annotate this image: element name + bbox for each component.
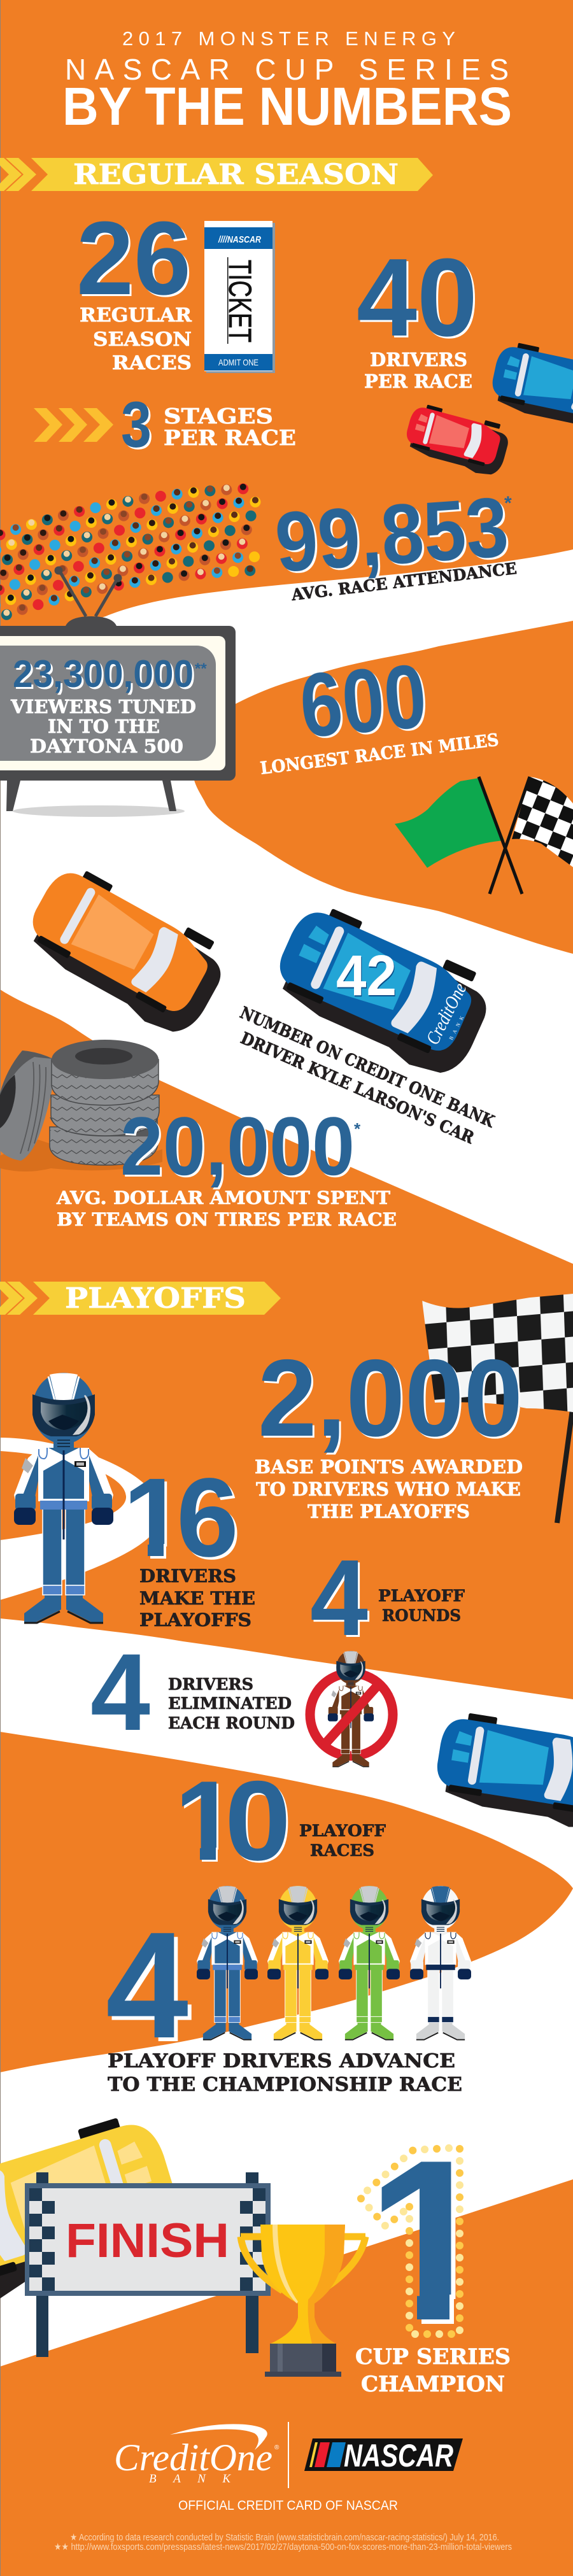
stat: 26 regular season races: SEASON [93,329,192,351]
stat: 40 drivers per race: DRIVERS [370,349,467,371]
icon: ticket: TICKET [222,260,258,343]
stat: 26 regular season races: REGULAR [80,304,192,327]
icon: ticket: ADMIT ONE [218,357,258,367]
icon: television [0,567,236,817]
stat: 1 cup series champion: 1 [366,2112,493,2368]
stat: 20,000 on tires: 20,000 [120,1100,355,1192]
stat: 2,000 base points: TO DRIVERS WHO MAKE [256,1478,521,1500]
stat: 4 drivers eliminated each round: EACH ROUND [168,1714,295,1732]
icon: car number 42: CreditOne [422,980,470,1048]
stat: 26 regular season races: RACES [112,352,192,374]
stat: 16 drivers make the playoffs: DRIVERS [139,1566,236,1587]
stat: 16 drivers make the playoffs: 1 [123,1455,185,1580]
stat: 4 drivers eliminated each round: DRIVERS [168,1675,253,1694]
icon: yellow race car [0,2108,190,2318]
stat: 4 playoff rounds: PLAYOFF [378,1587,465,1605]
logo: NASCAR: NASCAR [344,2438,453,2473]
stat: 4 playoff rounds [310,1538,465,1659]
stat: 99,853: * [504,493,512,514]
stat: 2,000 base points: THE PLAYOFFS [308,1501,470,1522]
title: BY THE NUMBERS [62,76,512,136]
white road: upper bend [0,549,573,1264]
white road: playoff swoosh [0,1438,161,1600]
sign: finish: FINISH [66,2214,229,2268]
stat: 10 playoff races: 1 [174,1757,237,1884]
sign: finish [25,2172,271,2357]
icon: driver blue [197,1886,258,2040]
icon: trophy [241,2225,365,2377]
title: 2017 MONSTER ENERGY [122,27,455,50]
stat: 99,853: 99,853 [272,480,511,590]
icon: crossed flags [395,777,573,894]
title: NASCAR CUP SERIES [65,53,509,86]
stat: 16 drivers make the playoffs: MAKE THE [139,1588,255,1609]
stat: 10 playoff races: PLAYOFF [299,1822,386,1840]
tagline: OFFICIAL CREDIT CARD OF NASCAR [178,2498,398,2513]
white road: lower bend [0,1618,573,2367]
icon: driver green [339,1886,400,2040]
stat: big 4: 4 [106,1901,188,2070]
label: playoff drivers advance: TO THE CHAMPIONSHIP RACE [108,2074,462,2096]
icon: chevrons [34,408,113,442]
label: number on credit one bank car: NUMBER ON CREDIT ONE BANK [237,1003,498,1132]
icon: driver in blue suit [14,1373,113,1623]
stat: 2,000 base points: BASE POINTS AWARDED [255,1456,523,1478]
stat: 1 cup series champion: CHAMPION [361,2372,505,2397]
stat: 16 drivers make the playoffs: 6 [176,1455,239,1580]
stat: 4 playoff rounds: 4 [310,1538,368,1659]
icon: television: IN TO THE [48,716,160,737]
stat: 40 drivers per race: 40 [357,235,478,359]
thin left edge [0,0,1,2576]
stat: 1 cup series champion [356,2144,509,2392]
stat: 2,000 base points: 2,000 [258,1337,523,1459]
icon: tire stack [0,1040,162,1171]
logo: Credit One Bank: BANK [149,2472,231,2486]
stat: 16 drivers make the playoffs: PLAYOFFS [139,1610,251,1631]
stat: 4 drivers eliminated each round: ELIMINATED [168,1694,292,1713]
stat: 20,000 on tires [56,1100,397,1230]
icon: blue race car playoffs [431,1709,573,1834]
icon: ticket [204,221,275,373]
stat: 4 drivers eliminated each round [90,1631,295,1753]
title [62,27,512,136]
stat: 20,000 on tires: * [354,1119,361,1138]
stat: 40 drivers per race: PER RACE [364,371,472,392]
logo: Credit One Bank [114,2424,279,2486]
icon: blue race car [486,339,573,439]
banner: regular season [0,158,433,191]
logo: Credit One Bank: CreditOne [114,2437,272,2479]
stat: 10 playoff races: 0 [225,1757,291,1884]
orange blob under playoff races [0,1732,573,2072]
stat: 3 stages per race: PER RACE [164,425,296,450]
stat: 600 longest race in miles: LONGEST RACE IN MILES [259,730,500,779]
stat: 16 drivers make the playoffs [131,1478,255,1627]
banner: playoffs [0,1282,281,1315]
icon: car number 42: 42 [336,944,397,1008]
stat: 4 drivers eliminated each round: 4 [90,1631,150,1753]
stat: 3 stages per race: 3 [121,388,152,461]
icon: checkered flag [422,1294,573,1523]
stat: 2,000 base points [255,1337,523,1522]
stat: 4 playoff rounds: ROUNDS [382,1606,461,1625]
icon: television: VIEWERS TUNED [10,696,196,718]
logo: Credit One Bank: ® [274,2444,279,2451]
stat: 600 longest race in miles: 600 [296,645,430,757]
stat: 10 playoff races [182,1780,386,1863]
icon: car number 42 [262,898,500,1085]
stat: 1 cup series champion: CUP SERIES [355,2344,511,2370]
icon: driver yellow [267,1886,329,2040]
stat: 20,000 on tires: AVG. DOLLAR AMOUNT SPENT [56,1187,390,1208]
stat: 26 regular season races [76,200,192,374]
stat: 20,000 on tires: BY TEAMS ON TIRES PER RACE [57,1209,397,1230]
illustration: crowd [0,486,256,658]
banner: playoffs: PLAYOFFS [65,1282,246,1315]
label: number on credit one bank car: DRIVER KYLE LARSON'S CAR [237,1029,477,1148]
icon: television: DAYTONA 500 [30,735,183,757]
icon: television: ** [195,660,207,677]
label: playoff drivers advance [108,2050,462,2096]
icon: driver white [410,1886,471,2040]
icon: orange race car [14,858,236,1044]
banner: regular season: REGULAR SEASON [73,159,399,191]
icon: red race car [401,401,513,479]
stat: 3 stages per race: STAGES [164,404,273,428]
footnotes [54,2532,512,2552]
footnotes: ★ According to data research conducted by Statistic Brain (www.statisticbrain.com/nascar-racing-statistics/) July 14, 2016. [70,2532,499,2543]
icon: eliminated driver [310,1651,393,1767]
icon: car number 42: BANK [448,1012,467,1041]
icon: ticket: ////NASCAR [218,234,261,245]
stat: 26 regular season races: 26 [76,200,191,316]
logo: NASCAR [304,2438,463,2473]
icon: television: 23,300,000 [13,653,194,695]
label: avg. race attendance: AVG. RACE ATTENDANCE [290,559,518,604]
stat: 10 playoff races: RACES [310,1841,374,1860]
stat: 600 longest race in miles [259,645,500,779]
label: playoff drivers advance: PLAYOFF DRIVERS ADVANCE [108,2050,455,2072]
stat: 3 stages per race [121,388,296,461]
